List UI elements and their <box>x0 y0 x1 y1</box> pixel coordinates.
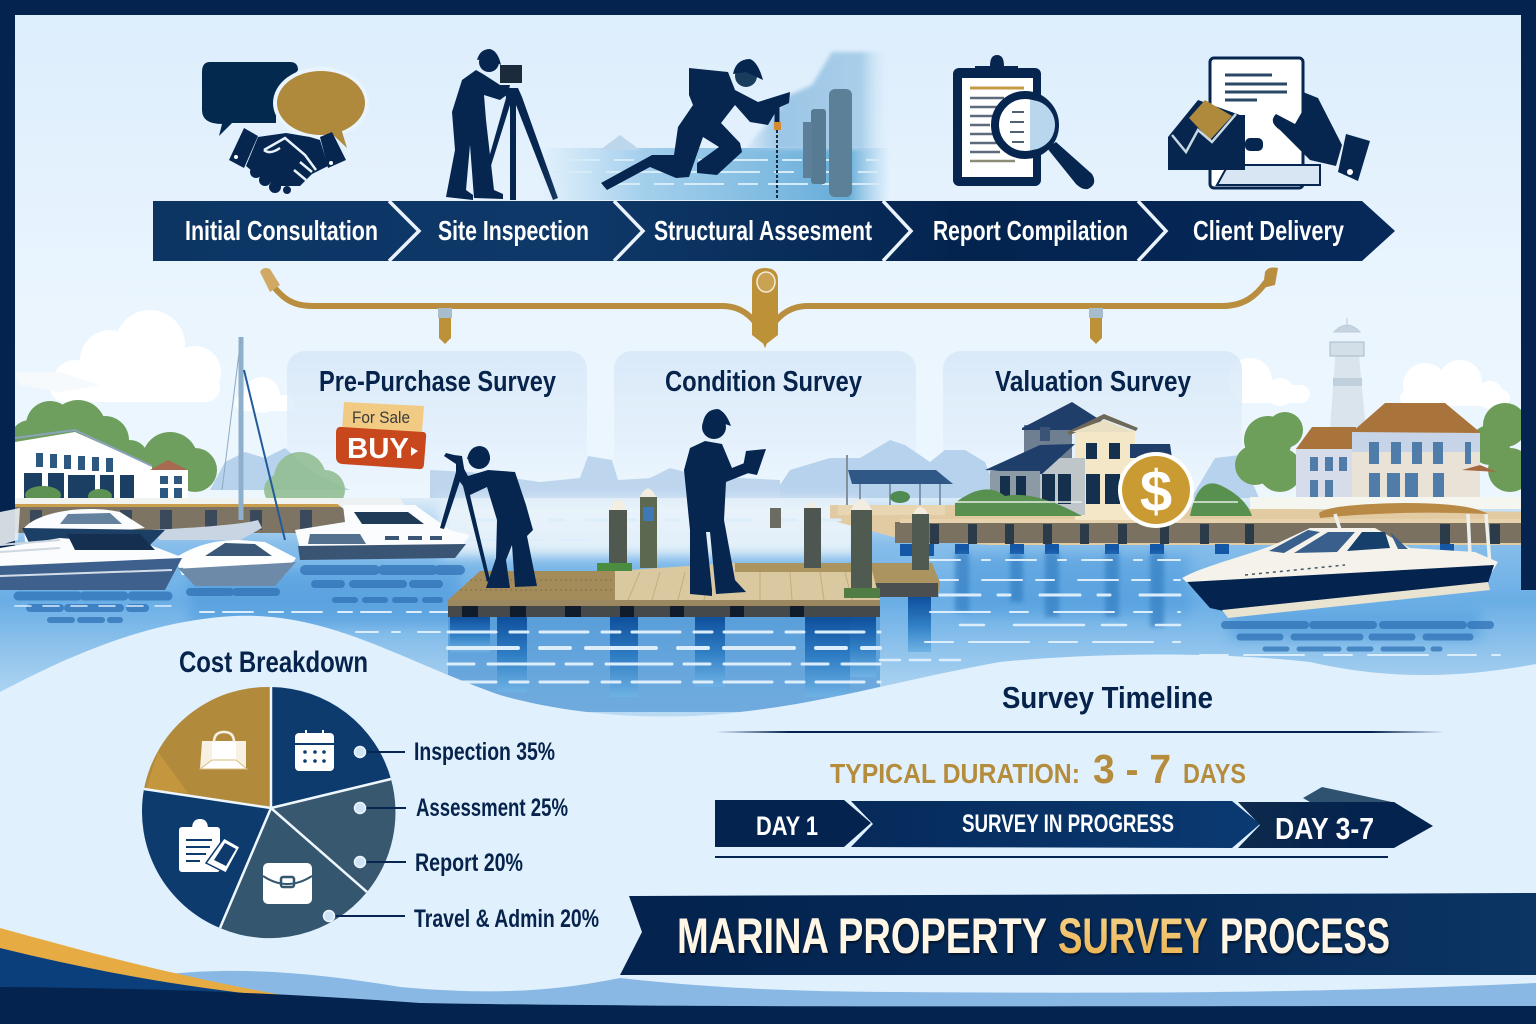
pale tree by the sign <box>264 452 345 510</box>
card: pre-purchase <box>287 351 587 491</box>
valuation house <box>955 402 1252 520</box>
legend labels <box>414 738 599 933</box>
left quay <box>15 498 345 533</box>
frame: top and sides <box>0 0 1536 590</box>
timeline arrows: DAY 3-7 <box>1275 811 1374 846</box>
value coin: $ <box>1140 459 1172 524</box>
icon: client delivery <box>1168 58 1370 188</box>
pale distant water band <box>440 500 860 556</box>
For Sale sign: For Sale <box>352 408 410 427</box>
icon: structural assessment diver <box>540 52 890 200</box>
legend labels: Report 20% <box>415 849 523 877</box>
legend labels: Travel & Admin 20% <box>414 905 599 933</box>
icon: briefcase <box>263 863 312 904</box>
moored boat: front-left cruiser over the frame <box>0 508 184 590</box>
water base <box>0 498 1536 738</box>
heading: Cost Breakdown <box>179 646 368 679</box>
far mountains left and right <box>210 440 1260 500</box>
icon: surveyor with tripod <box>446 49 558 200</box>
icon: clipboard and phone <box>179 819 240 873</box>
legend labels: Inspection 35% <box>414 738 555 766</box>
legend labels: Assessment 25% <box>416 794 568 822</box>
main wooden dock <box>448 563 940 617</box>
dock reflections <box>448 597 931 712</box>
typical duration: TYPICAL DURATION: <box>830 758 1080 789</box>
title banner: PROCESS <box>1220 908 1390 964</box>
moored boat: back-left cruiser <box>22 509 165 545</box>
water ripples <box>15 520 1500 682</box>
icon: consultation handshake <box>202 62 369 194</box>
step labels: Initial Consultation <box>185 215 378 246</box>
card: pre-purchase: Pre-Purchase Survey <box>319 366 556 398</box>
step labels <box>185 215 1344 246</box>
cost breakdown section <box>142 646 599 938</box>
survey timeline section <box>715 680 1444 858</box>
card: condition <box>614 351 916 491</box>
typical duration: DAYS <box>1183 758 1246 789</box>
lower panel wave <box>0 616 1536 1024</box>
deeper water patches <box>190 555 1480 640</box>
marina backdrop: clouds and horizon <box>15 310 1510 413</box>
For Sale sign <box>336 402 426 469</box>
distant skyline <box>430 456 780 500</box>
quay reflections <box>900 544 1454 627</box>
icon: bag <box>200 732 247 769</box>
sailboat mast <box>150 337 285 540</box>
pie chart <box>142 687 395 938</box>
bottom waves and frame <box>0 928 1536 1024</box>
title banner <box>620 893 1536 975</box>
card: condition: Condition Survey <box>665 366 862 398</box>
step labels: Report Compilation <box>933 215 1128 246</box>
typical duration: 3 - 7 <box>1093 746 1171 792</box>
left boathouse <box>15 430 188 504</box>
waterside pavilion <box>838 455 953 515</box>
cruiser boat right <box>1182 503 1498 618</box>
right quay <box>830 505 1530 545</box>
survey type cards <box>287 351 1242 491</box>
process chevron bar <box>153 201 1395 261</box>
boats reflections <box>18 570 1490 649</box>
step labels: Client Delivery <box>1193 215 1344 246</box>
timeline arrows: SURVEY IN PROGRESS <box>962 810 1174 838</box>
gold bracket connector <box>260 268 1278 345</box>
heading: Survey Timeline <box>1002 680 1213 715</box>
icon: report clipboard with magnifier <box>953 55 1094 189</box>
title banner: SURVEY <box>1058 908 1208 964</box>
moored boat: right cruiser <box>295 498 470 560</box>
For Sale sign: BUY <box>347 433 409 465</box>
clouds <box>50 310 1510 413</box>
icon: calendar <box>295 730 334 771</box>
title banner: MARINA PROPERTY <box>677 908 1047 964</box>
step labels: Structural Assesment <box>654 215 872 246</box>
inspector with tablet on dock <box>684 409 766 596</box>
right-side buildings and trees <box>1235 318 1532 509</box>
card: valuation: Valuation Survey <box>995 366 1191 398</box>
surveyor with tripod on dock <box>440 446 537 588</box>
marina landscape scene <box>0 318 1536 738</box>
typical duration <box>830 746 1246 792</box>
timeline arrows: DAY 1 <box>756 811 818 841</box>
value coin <box>1118 452 1194 528</box>
dock pilings <box>597 488 929 598</box>
card: valuation <box>943 351 1242 491</box>
step labels: Site Inspection <box>438 215 589 246</box>
left trees <box>10 400 217 492</box>
moored boat: small centre <box>175 540 296 586</box>
pie callouts <box>324 746 406 922</box>
timeline arrows <box>715 787 1433 848</box>
